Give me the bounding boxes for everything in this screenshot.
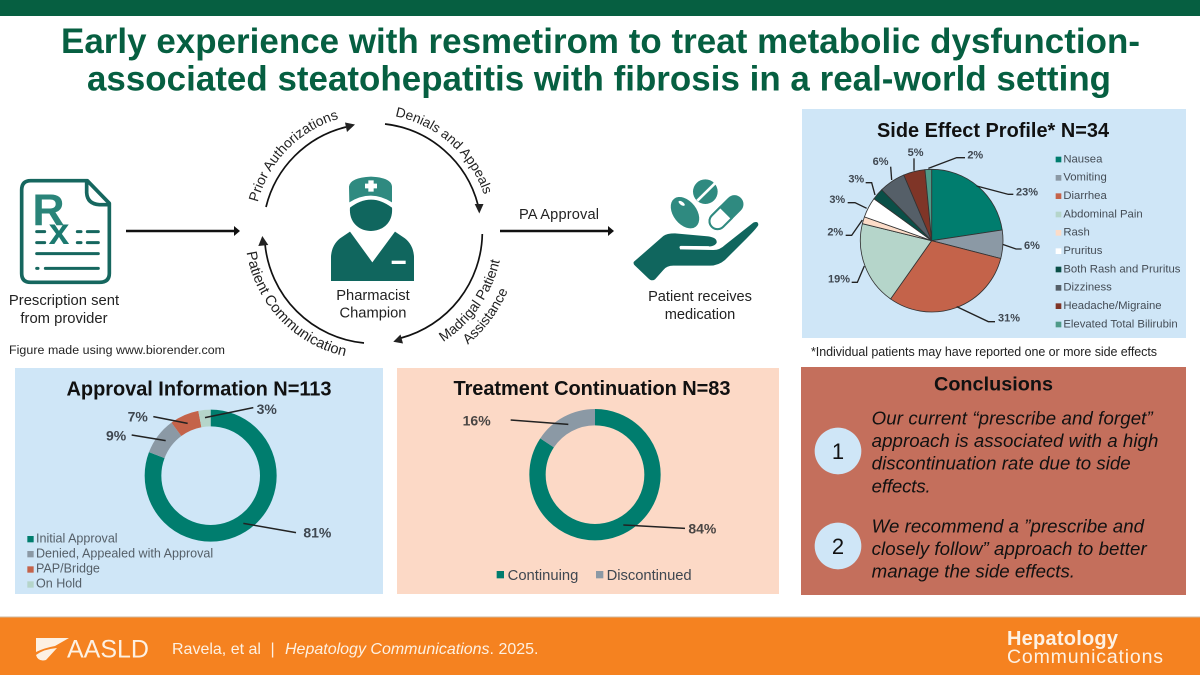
treatment donut chart — [463, 413, 717, 536]
cycle arrow: madrigal patient assistance — [393, 234, 482, 344]
pie legend — [1056, 153, 1181, 330]
panel: side effect profile — [802, 109, 1186, 338]
biorender credit: Figure made using www.biorender.com — [9, 343, 225, 357]
pie value labels: 6% — [873, 156, 889, 168]
pie value labels: 31% — [998, 313, 1020, 325]
pie value labels: 23% — [1016, 187, 1038, 199]
pie value labels: 3% — [848, 174, 864, 186]
pharmacist caption: Pharmacist — [336, 288, 410, 304]
pie legend: Pruritus — [1063, 245, 1103, 257]
treatment legend — [497, 568, 692, 584]
conclusion 2 — [815, 515, 1147, 581]
arrow: prescription to cycle — [126, 226, 240, 236]
side effect footnote: *Individual patients may have reported one or more side effects — [811, 345, 1157, 359]
approval donut chart: 3% — [257, 401, 277, 417]
treatment heading: Treatment Continuation N=83 — [454, 378, 730, 400]
citation: Hepatology Communications — [285, 641, 490, 658]
prescription caption: Prescription sent — [9, 293, 119, 309]
title — [61, 22, 1140, 98]
panel: conclusions — [801, 367, 1186, 595]
AASLD logo: AASLD — [67, 636, 149, 664]
pie value labels: 5% — [908, 147, 924, 159]
journal logo: Communications — [1007, 646, 1163, 668]
pie legend: Diarrhea — [1063, 190, 1107, 202]
pie legend: Nausea — [1063, 153, 1103, 165]
patient caption — [648, 289, 752, 323]
pharmacist caption: Champion — [340, 306, 406, 322]
pie leader lines — [846, 158, 1022, 322]
pie value labels: 6% — [1024, 240, 1040, 252]
conclusion 2: closely follow” approach to better — [872, 538, 1147, 559]
panel: treatment continuation — [397, 368, 779, 594]
journal logo: Hepatology — [1007, 628, 1119, 650]
prescription caption — [9, 293, 119, 327]
cycle labels: Patient Communication — [246, 252, 346, 356]
approval legend: On Hold — [36, 577, 82, 591]
citation: . 2025. — [490, 641, 538, 658]
pie value labels: 3% — [829, 194, 845, 206]
panel: approval information — [15, 368, 383, 594]
title: Early experience with resmetirom to treat metabolic dysfunction- — [61, 22, 1140, 61]
pie value labels: 2% — [827, 227, 843, 239]
pie legend: Elevated Total Bilirubin — [1063, 318, 1178, 330]
top green bar — [0, 0, 1200, 16]
PA approval label: PA Approval — [519, 207, 599, 223]
title: associated steatohepatitis with fibrosis in a real-world setting — [87, 60, 1111, 98]
pharmacist caption — [336, 288, 410, 322]
approval donut chart — [106, 401, 332, 540]
approval legend: Denied, Appealed with Approval — [36, 546, 213, 560]
pie value labels: 19% — [828, 274, 850, 286]
treatment donut chart: 16% — [463, 413, 491, 429]
cycle arrow: prior authorizations — [266, 122, 355, 207]
icon: hand with medication — [634, 179, 758, 280]
prescription caption: from provider — [20, 311, 108, 327]
pie legend: Headache/Migraine — [1063, 300, 1162, 312]
approval donut chart: 9% — [106, 427, 127, 443]
citation: | — [270, 641, 275, 658]
conclusions heading: Conclusions — [934, 374, 1053, 396]
conclusion 1: discontinuation rate due to side — [872, 453, 1131, 474]
conclusion 1: approach is associated with a high — [872, 430, 1158, 451]
conclusion 2: We recommend a ”prescribe and — [872, 515, 1145, 536]
icon: prescription document: x — [49, 210, 70, 252]
citation: Ravela, et al — [172, 641, 261, 658]
pie value labels — [827, 147, 1040, 325]
pie chart — [860, 169, 1003, 312]
cycle arrow: denials and appeals — [385, 124, 484, 214]
approval donut chart: 81% — [303, 524, 332, 540]
pie value labels: 2% — [967, 149, 983, 161]
icon: prescription document — [22, 181, 109, 282]
cycle arrow: patient communication — [258, 236, 364, 343]
icon: pharmacist — [331, 177, 414, 281]
cycle labels: Madrigal Patient — [438, 259, 500, 342]
conclusion 1: effects. — [872, 475, 931, 496]
conclusion 2: manage the side effects. — [872, 560, 1075, 581]
pie legend: Vomiting — [1063, 172, 1107, 184]
approval legend: Initial Approval — [36, 531, 118, 545]
journal logo — [1007, 628, 1163, 668]
arrow: PA approval — [500, 226, 614, 236]
treatment legend: Continuing — [508, 568, 578, 584]
conclusion 2: 2 — [832, 534, 844, 559]
icon: prescription document: R — [32, 186, 65, 235]
treatment donut chart: 84% — [688, 520, 717, 536]
conclusion 1: Our current “prescribe and forget” — [872, 407, 1153, 428]
footer band — [0, 616, 1200, 675]
cycle labels: Prior Authorizations — [248, 112, 338, 202]
patient caption: Patient receives — [648, 289, 752, 305]
approval heading: Approval Information N=113 — [66, 378, 332, 400]
cycle labels: Assistance — [464, 289, 507, 345]
conclusion 1: 1 — [832, 439, 844, 464]
approval legend: PAP/Bridge — [36, 562, 100, 576]
pie legend: Dizziness — [1063, 282, 1112, 294]
pie legend: Rash — [1063, 227, 1090, 239]
approval donut chart: 7% — [128, 409, 148, 425]
side effect heading: Side Effect Profile* N=34 — [877, 120, 1109, 142]
conclusion 1 — [815, 407, 1158, 496]
pie legend: Abdominal Pain — [1063, 208, 1143, 220]
cycle labels: Denials and Appeals — [396, 107, 490, 194]
treatment legend: Discontinued — [607, 568, 692, 584]
approval legend — [27, 531, 213, 591]
pie legend: Both Rash and Pruritus — [1063, 263, 1181, 275]
cycle labels — [246, 107, 507, 356]
patient caption: medication — [665, 307, 735, 323]
